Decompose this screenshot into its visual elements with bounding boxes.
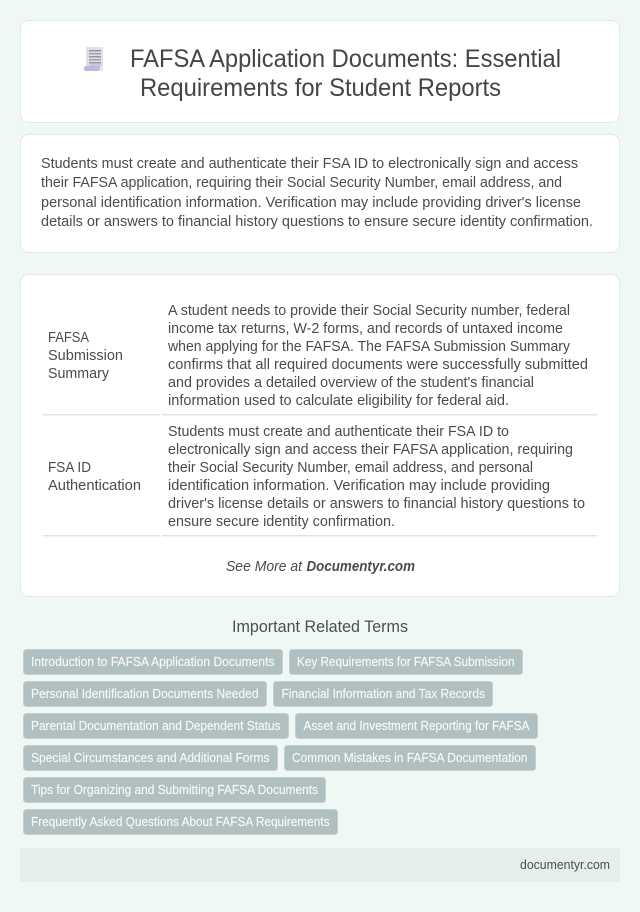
- row label: FAFSA Submission Summary: Summary: [48, 365, 109, 382]
- row text: FAFSA Submission Summary: income tax returns, W-2 forms, and records of untaxed income: [168, 320, 563, 337]
- tag: Introduction: [24, 650, 282, 674]
- row text: FSA ID Authentication: [168, 423, 585, 530]
- tag: Special Circumstances: Special Circumstances and Additional Forms: [31, 751, 270, 765]
- tag: Tips: [24, 778, 326, 802]
- row label: FSA ID Authentication: [48, 459, 141, 494]
- row text: FSA ID Authentication: their Social Security Number, email address, and personal: [168, 459, 533, 476]
- row text: FSA ID Authentication: identification information. Verification may include providing: [168, 477, 550, 494]
- tag: Introduction: Introduction to FAFSA Application Documents: [31, 655, 274, 669]
- tag: Asset and Investment: [296, 714, 538, 738]
- intro text: Students must create and authenticate their FSA ID to electronically sign and access: [41, 155, 578, 172]
- row text: FAFSA Submission Summary: [167, 302, 588, 409]
- row text: FAFSA Submission Summary: A student needs to provide their Social Security number, federal: [168, 302, 570, 319]
- intro text: their FAFSA application, requiring their Social Security Number, email address, and: [41, 174, 562, 191]
- see more link: See More at: [226, 558, 303, 575]
- tag: Personal Identification: Personal Identification Documents Needed: [31, 687, 259, 701]
- title: Requirements for Student Reports: [140, 74, 501, 102]
- panel: intro paragraph: [20, 134, 620, 252]
- related term tags: [24, 650, 538, 834]
- row text: FAFSA Submission Summary: and provides a detailed overview of the student's financial: [168, 374, 534, 391]
- tag: Parental Documentation: [24, 714, 288, 738]
- row label: FAFSA Submission Summary: Submission: [48, 347, 123, 364]
- row text: FAFSA Submission Summary: information used to calculate eligibility for federal aid.: [168, 392, 509, 409]
- row label: FAFSA Submission Summary: FAFSA: [48, 329, 89, 346]
- tag: FAQ: [24, 810, 338, 834]
- row text: FAFSA Submission Summary: when applying for the FAFSA. The FAFSA Submission Summary: [167, 338, 570, 355]
- tag: FAQ: Frequently Asked Questions About FAFSA Requirements: [31, 815, 330, 829]
- tag: Asset and Investment: Asset and Investment Reporting for FAFSA: [304, 719, 530, 733]
- tag: Special Circumstances: [24, 746, 278, 770]
- panel: header: [20, 20, 620, 122]
- row text: FAFSA Submission Summary: confirms that all required documents were successfully submitted: [168, 356, 588, 373]
- tag: Common Mistakes: Common Mistakes in FAFSA Documentation: [292, 751, 528, 765]
- tag: Tips: Tips for Organizing and Submitting FAFSA Documents: [31, 783, 318, 797]
- title: [130, 45, 561, 102]
- row label: FSA ID Authentication: FSA ID: [48, 459, 91, 476]
- see more link: Documentyr.com: [306, 558, 415, 575]
- footer bar: [20, 848, 620, 882]
- panel: document table: [20, 274, 620, 596]
- tag: Financial Information: [274, 682, 492, 706]
- row text: FSA ID Authentication: electronically sign and access their FAFSA application, requiring: [168, 441, 573, 458]
- tag: Key Requirements: [290, 650, 522, 674]
- tag: Personal Identification: [24, 682, 266, 706]
- heading: important related terms: Important Related Terms: [232, 618, 408, 636]
- title: FAFSA Application Documents: Essential: [130, 45, 561, 73]
- row text: FSA ID Authentication: Students must create and authenticate their FSA ID to: [168, 423, 509, 440]
- tag: Common Mistakes: [284, 746, 536, 770]
- tag: Parental Documentation: Parental Documentation and Dependent Status: [31, 719, 280, 733]
- row text: FSA ID Authentication: ensure secure identity confirmation.: [168, 513, 395, 530]
- icon: document scroll: [84, 47, 103, 71]
- intro text: personal identification information. Verification may include providing driver's license: [41, 194, 581, 211]
- row text: FSA ID Authentication: driver's license details or answers to financial history questions to: [168, 495, 585, 512]
- see more link: [226, 558, 415, 575]
- intro text: details or answers to financial history questions to ensure secure identity confirmation.: [41, 213, 593, 230]
- tag: Key Requirements: Key Requirements for FAFSA Submission: [297, 655, 515, 669]
- footer source: documentyr.com: [520, 858, 610, 872]
- row label: FSA ID Authentication: Authentication: [48, 477, 141, 494]
- row label: FAFSA Submission Summary: [48, 329, 123, 382]
- tag: Financial Information: Financial Information and Tax Records: [282, 687, 485, 701]
- intro text: [41, 155, 593, 230]
